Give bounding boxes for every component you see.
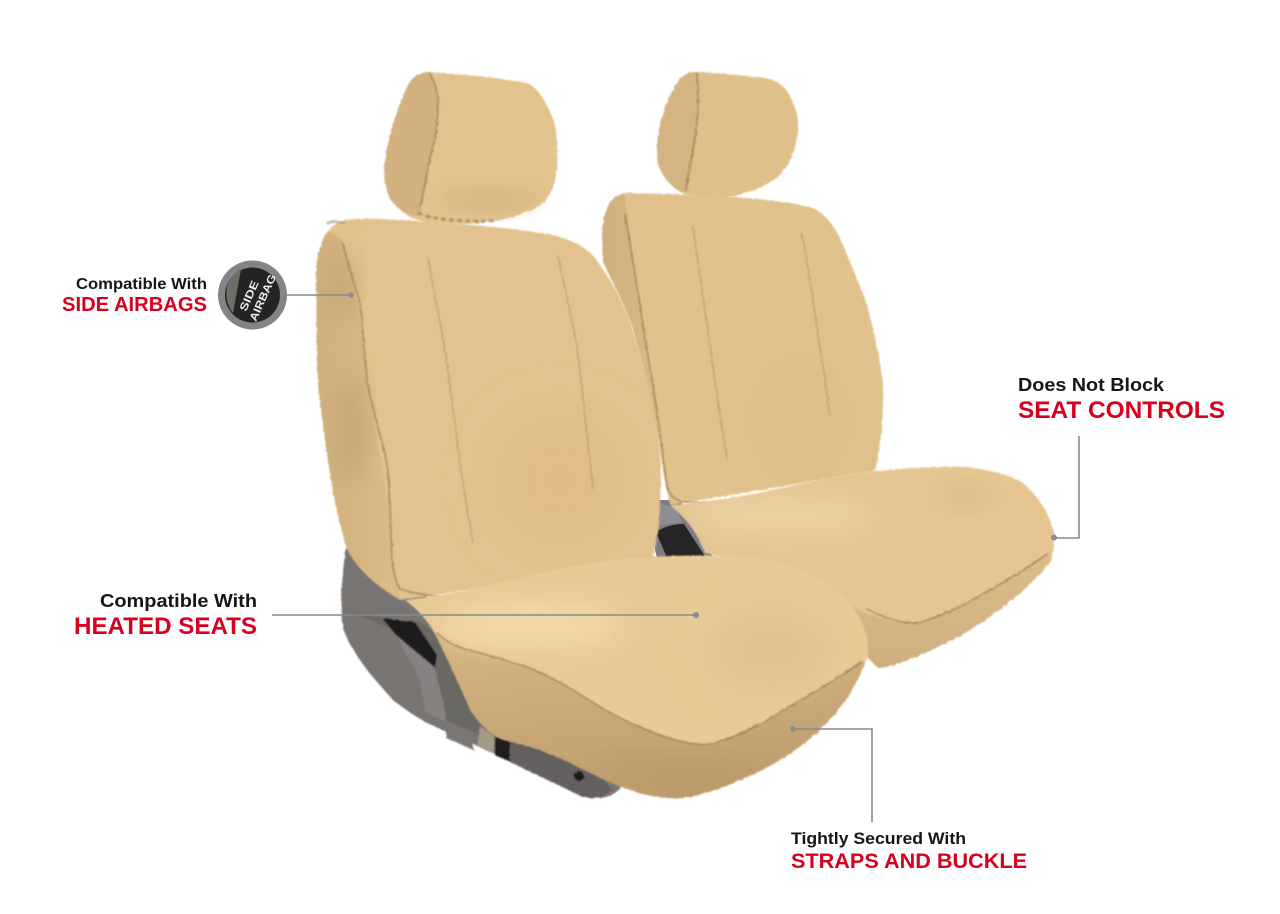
icon: side airbag badge: AIRBAG: [248, 273, 279, 323]
seat controls label: Does Not Block: [1018, 375, 1165, 395]
heated seats label: [74, 591, 257, 640]
right backrest: [598, 190, 883, 510]
side airbags connector line: [286, 292, 354, 298]
right cushion: [670, 467, 1060, 680]
left seat hardware: [342, 548, 630, 798]
icon: side airbag badge: [218, 260, 287, 330]
heated seats connector line: [272, 612, 699, 618]
seat controls label: [1018, 375, 1225, 424]
seat controls connector line: [1051, 436, 1079, 540]
callout: side airbags: [62, 260, 354, 330]
straps label: Tightly Secured With: [791, 830, 966, 848]
heated seats label: Compatible With: [100, 591, 257, 611]
side airbags label: SIDE AIRBAGS: [62, 294, 207, 316]
straps label: [791, 830, 1027, 873]
straps connector line: [790, 726, 872, 822]
callout: straps and buckle: [790, 726, 1027, 873]
callout: heated seats: [74, 591, 699, 640]
left seat: [310, 72, 880, 810]
left backrest: [310, 219, 661, 610]
callout: seat controls: [1018, 375, 1225, 540]
straps label: STRAPS AND BUCKLE: [791, 850, 1027, 873]
side airbags label: Compatible With: [76, 276, 207, 293]
left cushion: [405, 555, 880, 810]
side airbags label: [62, 276, 207, 316]
seat controls label: SEAT CONTROLS: [1018, 397, 1225, 424]
right headrest: [657, 72, 798, 198]
right seat hardware: [653, 500, 715, 562]
left headrest: [384, 72, 557, 224]
heated seats label: HEATED SEATS: [74, 613, 257, 640]
right seat: [598, 72, 1060, 680]
icon: side airbag badge: SIDE: [238, 279, 262, 313]
